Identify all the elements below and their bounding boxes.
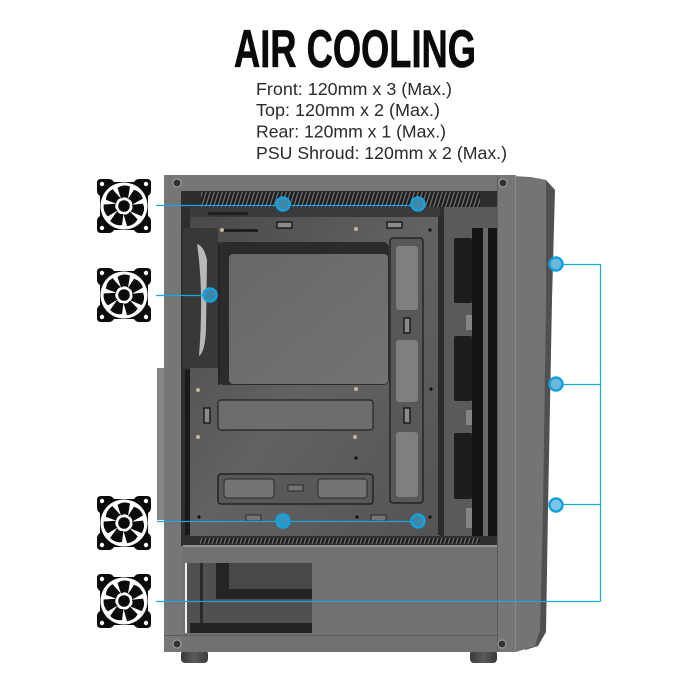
main cutout <box>218 242 389 385</box>
interior <box>181 191 497 546</box>
chassis frame <box>164 175 516 652</box>
feet <box>181 650 497 663</box>
front bay <box>444 207 497 537</box>
fan capacity list: Top: 120mm x 2 (Max.) <box>256 100 440 120</box>
motherboard tray <box>190 207 440 536</box>
icon: fan top <box>97 179 151 233</box>
front fans <box>472 228 497 544</box>
icon: fan psu shroud 1 <box>97 496 151 550</box>
PSU shroud <box>183 545 497 652</box>
corner screws <box>173 179 507 648</box>
top mesh vent <box>201 192 480 207</box>
front panel dark edge <box>525 177 555 650</box>
callout lines <box>156 206 600 602</box>
PSU shroud opening <box>185 563 312 633</box>
rear bracket <box>157 368 165 520</box>
title: AIR COOLING <box>234 20 476 79</box>
fan capacity list <box>256 79 507 163</box>
rear mesh strip <box>185 370 190 535</box>
rear fan <box>183 228 218 368</box>
fan capacity list: PSU Shroud: 120mm x 2 (Max.) <box>256 143 507 163</box>
PC case <box>157 175 555 663</box>
PCI panel <box>218 400 373 430</box>
bottom mesh <box>183 536 497 545</box>
lower panel <box>218 474 373 504</box>
fan capacity list: Rear: 120mm x 1 (Max.) <box>256 122 446 142</box>
callout dots <box>204 198 562 528</box>
vertical hole panel <box>390 238 423 503</box>
icon: fan psu shroud 2 <box>97 574 151 628</box>
fan capacity list: Front: 120mm x 3 (Max.) <box>256 79 452 99</box>
expansion slots <box>208 212 258 232</box>
standoffs <box>196 227 358 439</box>
front panel face <box>514 176 546 652</box>
icon: fan rear <box>97 268 151 322</box>
